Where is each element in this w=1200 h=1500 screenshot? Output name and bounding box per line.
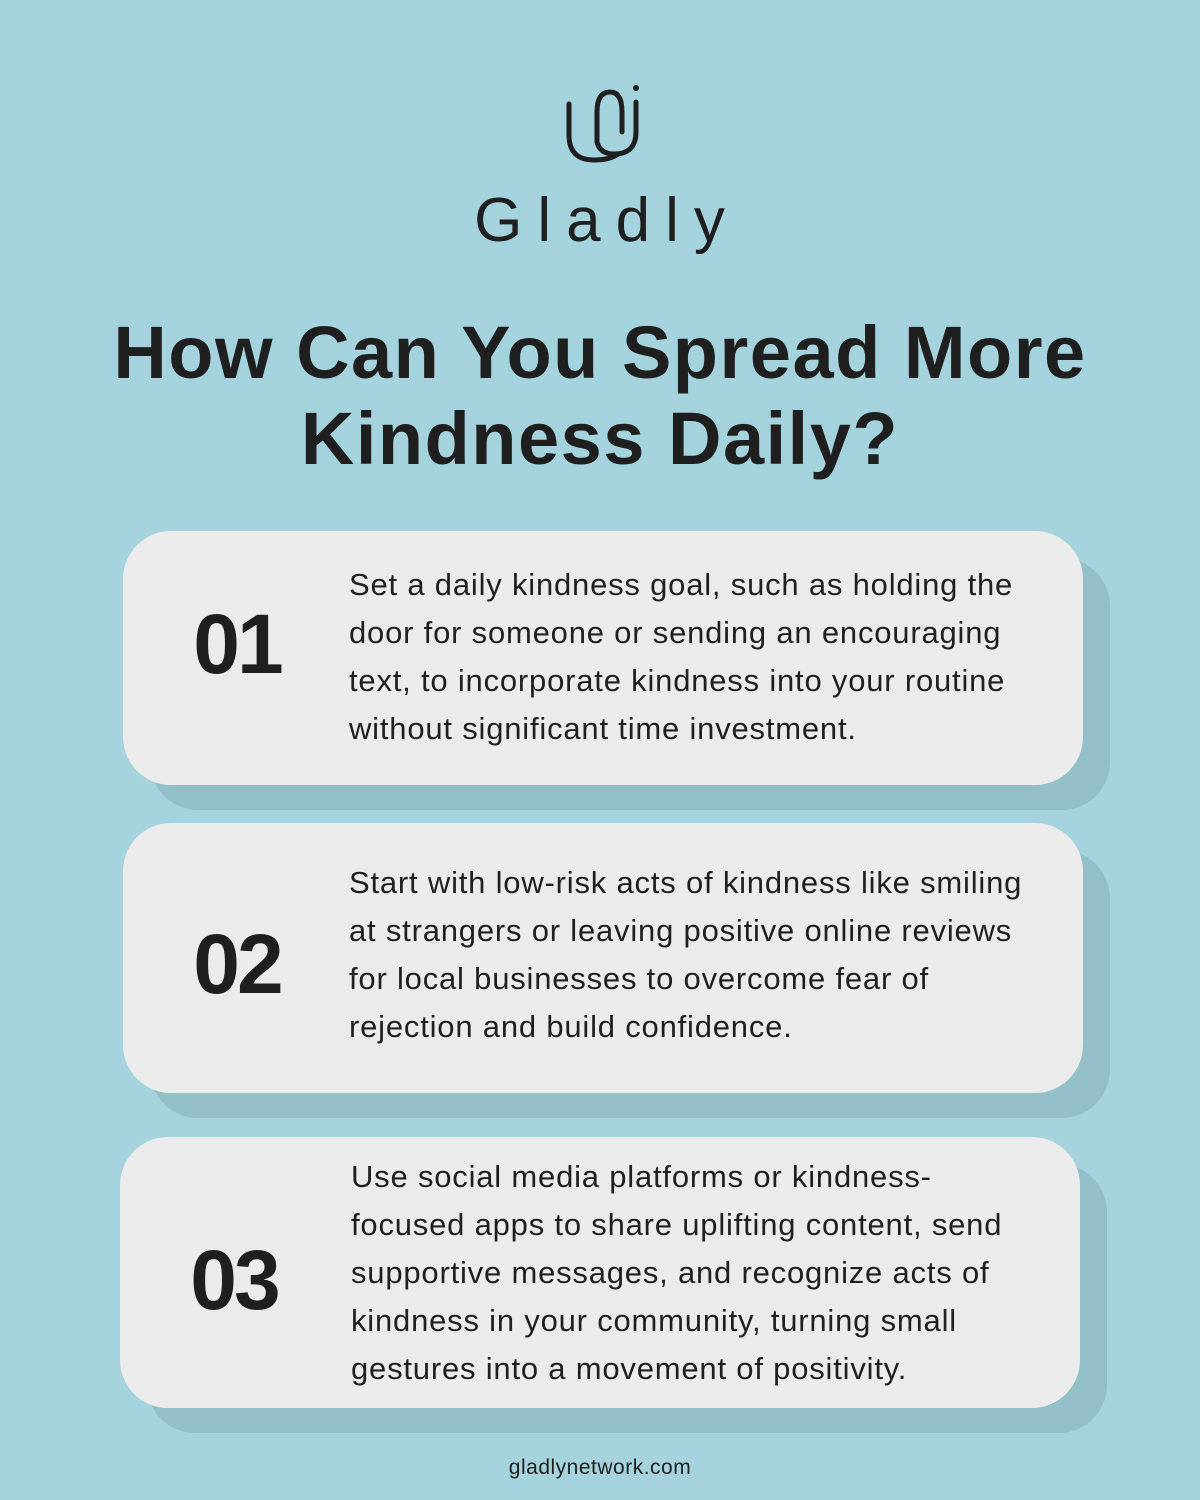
panel: tip 1 <box>123 531 1110 810</box>
number 02: 02 <box>193 917 281 1011</box>
text 3 <box>351 1159 1002 1386</box>
text 2 <box>349 865 1022 1044</box>
brand name: Gladly <box>474 186 740 255</box>
text 2: rejection and build confidence. <box>349 1009 793 1044</box>
text 1: without significant time investment. <box>349 711 857 746</box>
text 3: focused apps to share uplifting content, send <box>351 1207 1002 1242</box>
text 1: door for someone or sending an encouraging <box>349 615 1001 650</box>
title: How Can You Spread More <box>113 311 1087 394</box>
title <box>113 311 1087 480</box>
text 1: text, to incorporate kindness into your routine <box>349 663 1005 698</box>
text 3: gestures into a movement of positivity. <box>351 1351 907 1386</box>
footer url: gladlynetwork.com <box>509 1456 691 1479</box>
number 03: 03 <box>190 1233 278 1327</box>
text 3: kindness in your community, turning small <box>351 1303 957 1338</box>
text 3: supportive messages, and recognize acts of <box>351 1255 989 1290</box>
title: Kindness Daily? <box>301 397 899 480</box>
text 1: Set a daily kindness goal, such as holding the <box>349 567 1013 602</box>
text 2: for local businesses to overcome fear of <box>349 961 929 996</box>
text 2: at strangers or leaving positive online reviews <box>349 913 1012 948</box>
text 1 <box>349 567 1013 746</box>
number 01: 01 <box>193 597 281 691</box>
text 2: Start with low-risk acts of kindness like smiling <box>349 865 1022 900</box>
text 3: Use social media platforms or kindness- <box>351 1159 932 1194</box>
panel: tip 2 <box>123 823 1110 1118</box>
logo icon <box>566 85 639 162</box>
